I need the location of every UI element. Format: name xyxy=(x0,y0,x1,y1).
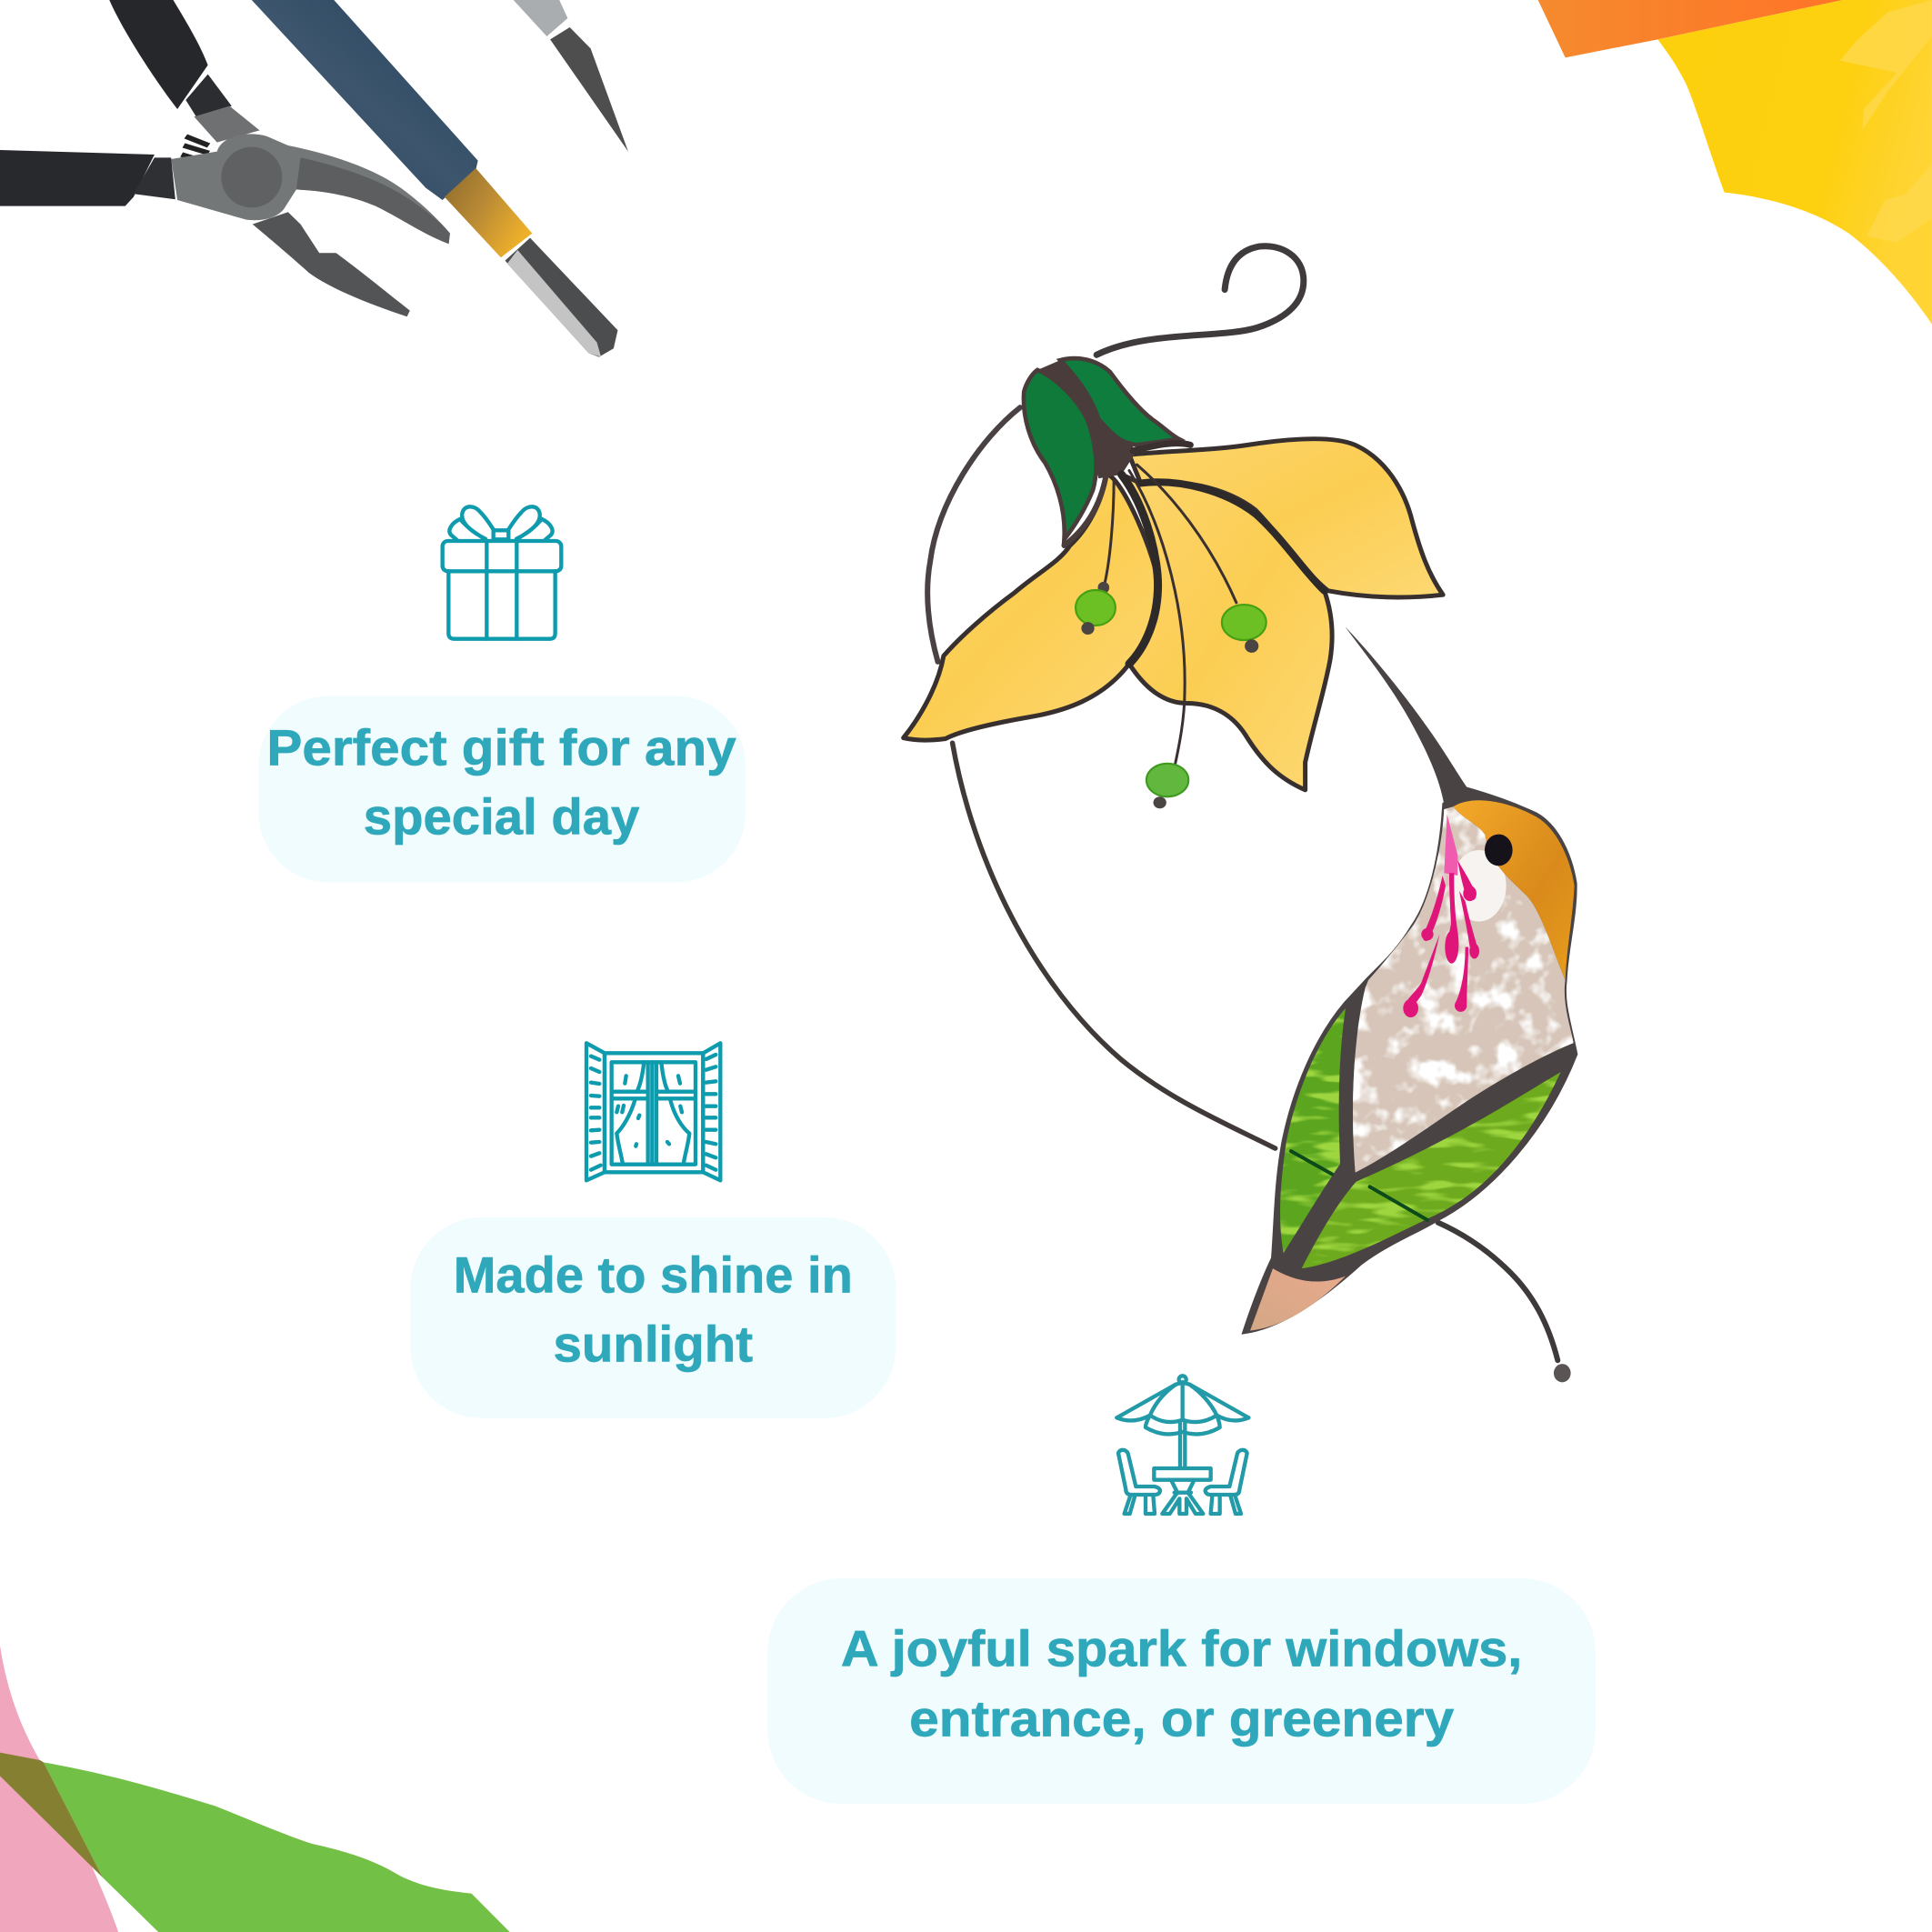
illustration: wire stem and hanging hook xyxy=(953,246,1304,1148)
green beads xyxy=(1097,582,1109,594)
lead silhouette xyxy=(1244,789,1576,1332)
wire ring xyxy=(927,407,1020,662)
pliers pivot xyxy=(221,147,282,207)
pink throat streaks xyxy=(1444,815,1457,876)
pink glass xyxy=(0,1646,118,1932)
pliers left handle xyxy=(0,150,155,206)
eye xyxy=(1485,835,1513,866)
stem to bird xyxy=(953,743,1276,1148)
beak xyxy=(1345,626,1470,804)
lower wing glass xyxy=(1300,1069,1564,1274)
text: A joyful spark for windows, xyxy=(841,1620,1522,1677)
glass cutter handle xyxy=(252,0,478,200)
middle petal xyxy=(1122,475,1332,790)
green glass xyxy=(44,1762,510,1932)
wing dark lines xyxy=(1291,1151,1427,1220)
callout: perfect gift xyxy=(259,696,746,882)
pill xyxy=(410,1217,896,1418)
right green sepal xyxy=(1060,358,1179,445)
image: pliers and glass cutting tools xyxy=(0,0,628,357)
pliers spring xyxy=(182,136,209,162)
illustration: stained glass flower xyxy=(904,358,1443,808)
lead between sepals xyxy=(1037,360,1136,478)
image: pink and green glass corner xyxy=(0,1646,510,1932)
glass highlights xyxy=(1839,0,1932,243)
right petal xyxy=(1129,439,1443,597)
foot xyxy=(1438,1223,1557,1360)
text line 2: sunlight xyxy=(553,1316,753,1373)
image: orange and yellow glass corner xyxy=(1538,0,1932,325)
overlap of pink and green xyxy=(0,1753,103,1877)
cutter head xyxy=(506,238,617,357)
orange head glass xyxy=(1453,800,1575,980)
lead lines between petals xyxy=(1122,475,1158,664)
cutter brass collar xyxy=(445,168,532,257)
craft knife handle xyxy=(514,0,567,36)
text line 2: entrance, or greenery xyxy=(909,1691,1454,1747)
text: Perfect gift for any xyxy=(266,720,736,776)
stamens xyxy=(1105,478,1114,585)
illustration: stained glass hummingbird xyxy=(1244,626,1579,1382)
upper wing glass xyxy=(1280,1008,1346,1253)
text: Made to shine in xyxy=(454,1247,853,1304)
pliers upper handle xyxy=(109,0,208,109)
icon: window with shutters xyxy=(586,1043,720,1180)
hook xyxy=(1096,246,1304,355)
chest glass xyxy=(1348,804,1579,1182)
left green sepal xyxy=(1024,370,1096,539)
pill xyxy=(767,1578,1596,1804)
tail glass xyxy=(1250,1268,1346,1331)
text line 2: special day xyxy=(364,788,639,845)
yellow glass xyxy=(1657,0,1932,325)
left petal xyxy=(904,475,1158,740)
orange glass xyxy=(1538,0,1843,57)
icon: patio table and umbrella xyxy=(1116,1376,1248,1514)
icon: gift box xyxy=(443,506,561,639)
callout: made to shine xyxy=(410,1217,896,1418)
craft knife blade xyxy=(550,27,628,152)
pliers body and upper jaw xyxy=(171,134,450,244)
pliers lower jaw xyxy=(253,212,410,316)
pink drop ends xyxy=(1403,886,1479,1017)
pill xyxy=(259,696,746,882)
callout: joyful spark xyxy=(767,1578,1596,1804)
